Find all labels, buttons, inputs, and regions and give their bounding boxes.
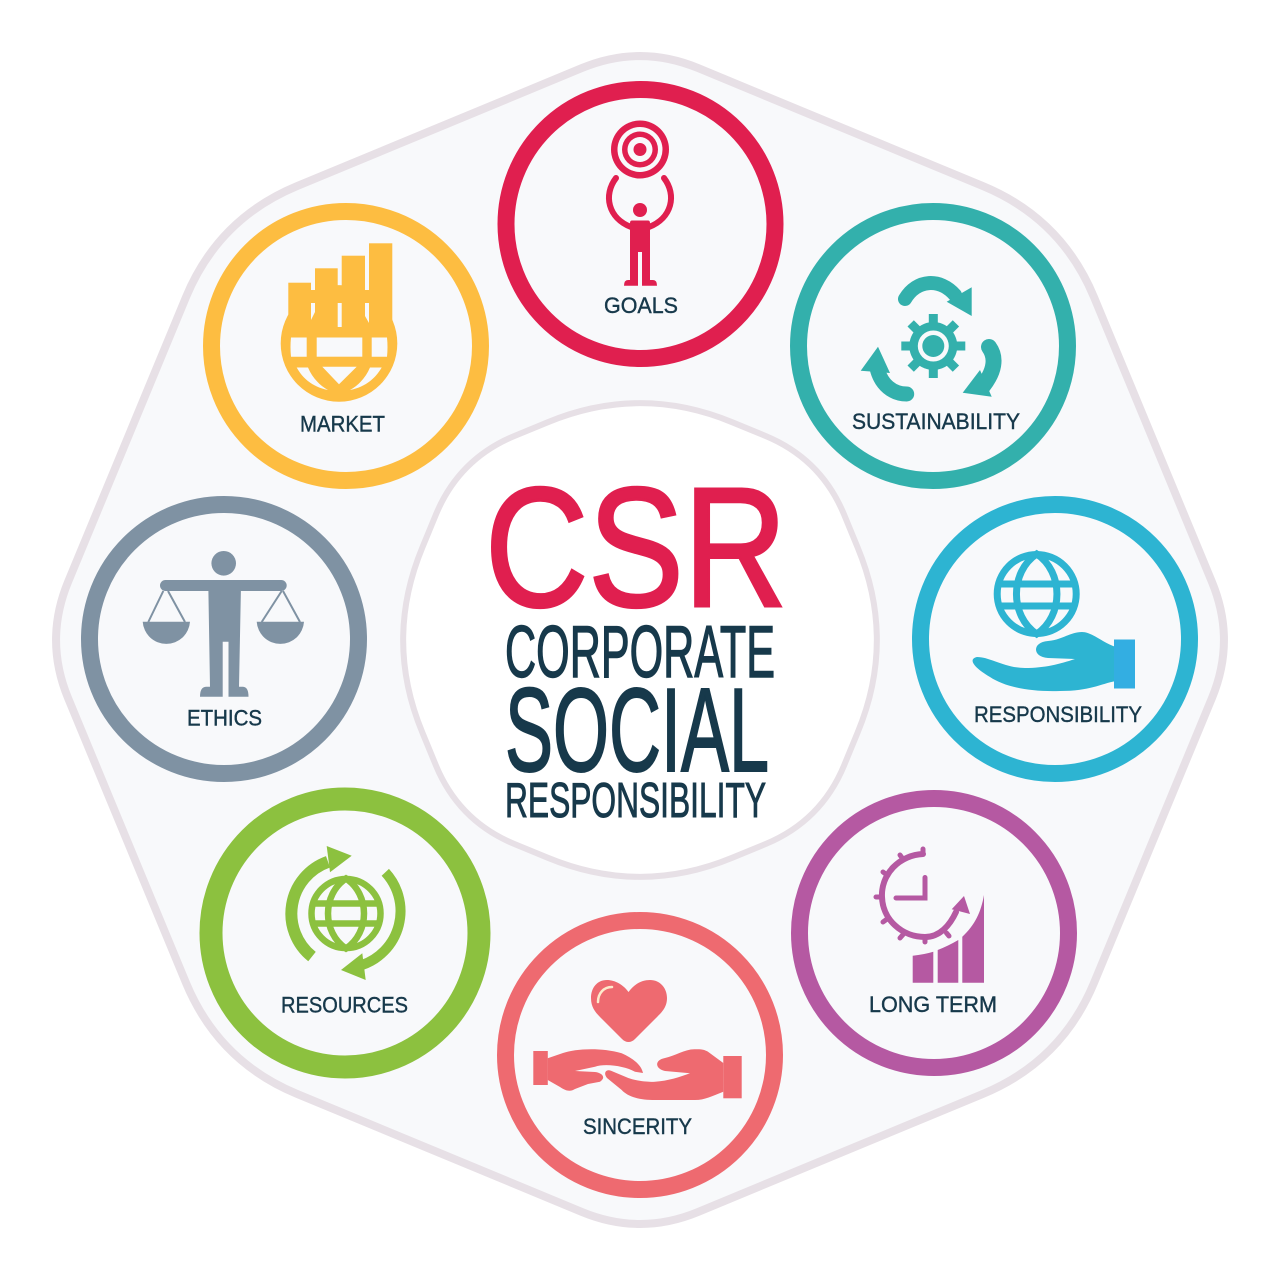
label: sincerity: SINCERITY — [583, 1114, 692, 1139]
subheading: social: SOCIAL — [505, 664, 769, 797]
panel: resources — [211, 799, 479, 1067]
panel: sustainability — [798, 212, 1068, 480]
label: market: MARKET — [300, 412, 385, 436]
heading: CSR: CSR — [485, 453, 787, 643]
ring: ethics — [90, 504, 358, 774]
label: resources: RESOURCES — [281, 992, 408, 1018]
subheading: responsibility: RESPONSIBILITY — [505, 774, 766, 828]
ring: goals — [506, 90, 775, 358]
center blob panel — [403, 403, 877, 877]
label: ethics: ETHICS — [187, 706, 262, 730]
ring: market — [212, 212, 480, 480]
label: goals: GOALS — [604, 293, 678, 318]
icon: hands with heart — [533, 980, 742, 1100]
icon: gear with cycle arrows — [861, 283, 994, 397]
subheading: corporate: CORPORATE — [505, 612, 775, 693]
ring: resources — [211, 799, 479, 1067]
icon: clock with growth bars — [876, 849, 984, 983]
ring: sincerity — [506, 920, 774, 1190]
title: CSR Corporate Social Responsibility — [485, 453, 787, 828]
icon: hand holding globe — [973, 554, 1135, 691]
ring: long term — [800, 798, 1068, 1068]
label: sustainability: SUSTAINABILITY — [852, 409, 1020, 434]
panel: goals — [506, 90, 775, 358]
icon: globe with rotating arrows — [291, 846, 401, 980]
panel: market — [212, 212, 480, 480]
panel: ethics — [90, 504, 358, 774]
ring: sustainability — [798, 212, 1068, 480]
icon: person as balance scale — [143, 551, 304, 697]
icon: person holding target — [609, 120, 671, 286]
panel: long term — [800, 798, 1068, 1068]
label: long term: LONG TERM — [869, 992, 997, 1017]
panel: sincerity — [506, 920, 774, 1190]
icon: bar chart over globe — [281, 243, 397, 402]
label: responsibility: RESPONSIBILITY — [974, 702, 1142, 727]
ring: responsibility — [920, 504, 1190, 774]
panel: responsibility — [920, 504, 1190, 774]
